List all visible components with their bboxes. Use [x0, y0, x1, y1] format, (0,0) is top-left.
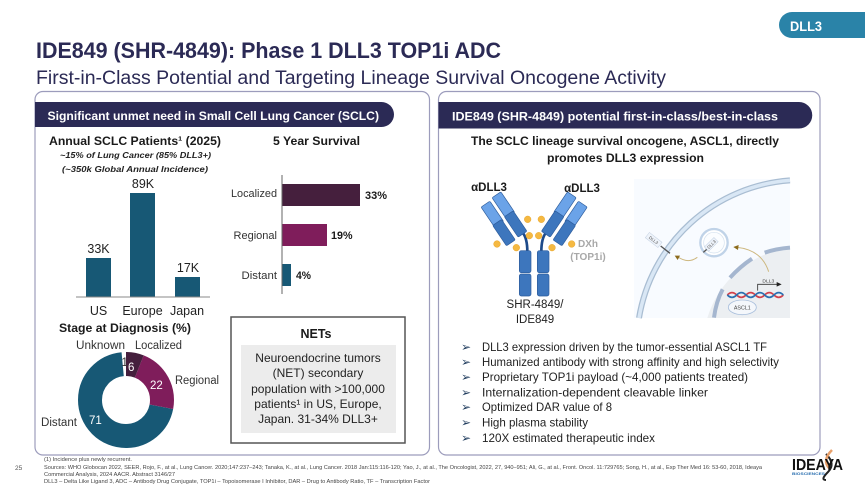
bar chart: annual patients: 33K [87, 242, 110, 256]
callout: NETs: population with >100,000 [251, 382, 385, 396]
panel: unmet need in SCLC [35, 92, 430, 455]
list: key attributes: Internalization-dependent cleavable linker [482, 386, 708, 400]
footnotes: DLL3 – Delta Like Ligand 3, ADC – Antibody Drug Conjugate, TOP1i – Topoisomerase I Inhibitor, DAR – Drug to Antibody Ratio, TF – Transcription Factor [44, 479, 430, 485]
list: key attributes: High plasma stability [482, 416, 588, 430]
diagram: cell expressing DLL3 [634, 179, 790, 318]
bar chart: annual patients: Japan [170, 304, 204, 318]
callout: NETs: Neuroendocrine tumors [255, 351, 381, 365]
bar chart: annual patients: Europe [122, 304, 163, 318]
diagram: antibody drug conjugate: SHR-4849/ [507, 299, 564, 311]
callout: NETs: Japan. 31-34% DLL3+ [258, 412, 378, 426]
list: key attributes: ➢ [461, 416, 471, 430]
diagram: antibody drug conjugate [471, 182, 606, 326]
diagram: antibody drug conjugate: DXh [578, 239, 598, 250]
ASCL1 [728, 300, 756, 315]
callout: NETs [231, 317, 405, 443]
panel heading: first-in-class: IDE849 (SHR-4849) potential first-in-class/best-in-class [452, 110, 778, 124]
donut chart: stage at diagnosis: 6 [128, 362, 134, 374]
list: key attributes: Optimized DAR value of 8 [482, 400, 612, 414]
heading: stage at diagnosis: Stage at Diagnosis (%) [59, 321, 191, 335]
membrane DLL3 [661, 246, 670, 253]
footnotes: Sources: WHO Globocan 2022, SEER, Rojo, F., at al., Lung Cancer. 2020;147:237–243; Tanaka, K., at al., Lung Cancer. 2018 Jan:115:116-120; Yao, J., at al., The Oncologist, 2022, 27, 940–951; Ali, G., at al., Front. Oncol. 11:729765; Song, H., at al., Exp Ther Med 16: 53-60, 2018, Ideaya [44, 465, 762, 471]
list: key attributes: ➢ [461, 431, 471, 445]
bar chart: 5 year survival: 19% [331, 230, 353, 242]
list: key attributes: ➢ [461, 340, 471, 354]
bar chart: 5 year survival: Distant [242, 270, 277, 282]
footnotes: (1) Incidence plus newly recurrent. [44, 457, 132, 463]
subtitle: First-in-Class Potential and Targeting Lineage Survival Oncogene Activity [36, 68, 666, 89]
bar chart: annual patients: 89K [132, 177, 155, 191]
heading: annual patients: (~350k Global Annual Incidence) [62, 164, 208, 174]
diagram: antibody drug conjugate: (TOP1i) [570, 252, 606, 263]
heading: annual patients: ~15% of Lung Cancer (85% DLL3+) [60, 150, 211, 160]
bar chart: 5 year survival: 33% [365, 190, 387, 202]
donut chart: stage at diagnosis: 71 [89, 415, 102, 427]
bar chart: 5 year survival: Localized [231, 188, 277, 200]
bar chart: annual patients: 17K [177, 261, 200, 275]
heading: 5 year survival: 5 Year Survival [273, 134, 360, 148]
logo: IDEAYA: BIOSCIENCES [792, 472, 826, 476]
donut chart: stage at diagnosis [41, 340, 219, 436]
heading: annual patients [49, 134, 221, 174]
logo: IDEAYA [792, 450, 843, 480]
callout: NETs: (NET) secondary [273, 366, 363, 380]
donut chart: stage at diagnosis: Regional [175, 375, 219, 387]
bar chart: annual patients [76, 177, 210, 318]
DNA [727, 293, 783, 297]
heading: ASCL1 statement [471, 134, 779, 165]
list: key attributes: ➢ [461, 370, 471, 384]
title: IDE849 (SHR-4849): Phase 1 DLL3 TOP1i ADC [36, 38, 501, 63]
tag: DLL3 [779, 12, 865, 38]
list: key attributes [461, 340, 779, 445]
heading: annual patients: Annual SCLC Patients¹ (2025) [49, 134, 221, 148]
panel heading: first-in-class [438, 102, 812, 128]
antibody hinge [523, 233, 546, 252]
donut chart: stage at diagnosis: 22 [150, 380, 163, 392]
footnotes [44, 457, 762, 485]
vesicle [700, 229, 728, 256]
heading: ASCL1 statement: The SCLC lineage survival oncogene, ASCL1, directly [471, 134, 779, 148]
list: key attributes: 120X estimated therapeutic index [482, 431, 655, 445]
diagram: antibody drug conjugate: IDE849 [516, 314, 554, 326]
donut chart: stage at diagnosis: Localized [135, 340, 182, 352]
cell membrane [639, 180, 790, 318]
heading: ASCL1 statement: promotes DLL3 expression [547, 151, 704, 165]
logo: IDEAYA: IDEAYA [792, 457, 843, 474]
bar chart: 5 year survival: Regional [234, 230, 277, 242]
diagram: cell expressing DLL3: DLL3 [648, 235, 660, 246]
donut chart: stage at diagnosis: Unknown [76, 340, 125, 352]
list: key attributes: ➢ [461, 355, 471, 369]
list: key attributes: Proprietary TOP1i payload (~4,000 patients treated) [482, 370, 748, 384]
donut chart: stage at diagnosis: Distant [41, 417, 78, 429]
panel heading: SCLC: Significant unmet need in Small Cell Lung Cancer (SCLC) [48, 109, 379, 123]
panel: first-in-class potential [438, 92, 820, 455]
list: key attributes: Humanized antibody with strong affinity and high selectivity [482, 355, 779, 369]
list: key attributes: DLL3 expression driven by the tumor-essential ASCL1 TF [482, 340, 767, 354]
page number: 25 [15, 465, 23, 472]
tag: DLL3: DLL3 [790, 18, 822, 34]
footnotes: Commercial Analysis, 2024 AACR. Abstract 3146/27 [44, 472, 175, 478]
nucleus [707, 248, 790, 318]
bar chart: 5 year survival: 4% [296, 270, 311, 282]
trafficking arrows [737, 247, 769, 272]
diagram: antibody drug conjugate: αDLL3 [471, 182, 507, 194]
callout: NETs: NETs [300, 327, 332, 341]
callout: NETs: patients¹ in US, Europe, [254, 397, 382, 411]
bar chart: annual patients: US [90, 304, 107, 318]
list: key attributes: ➢ [461, 386, 471, 400]
panel heading: SCLC [35, 102, 394, 127]
donut chart: stage at diagnosis: 1 [122, 357, 128, 369]
diagram: cell expressing DLL3: DLL3 [762, 278, 775, 284]
diagram: cell expressing DLL3: ASCL1 [734, 305, 751, 311]
diagram: antibody drug conjugate: αDLL3 [564, 183, 600, 195]
DLL3 gene arrow [758, 284, 777, 291]
diagram: cell expressing DLL3: DLL3 [706, 239, 717, 250]
bar chart: 5 year survival [231, 175, 387, 294]
list: key attributes: ➢ [461, 400, 471, 414]
